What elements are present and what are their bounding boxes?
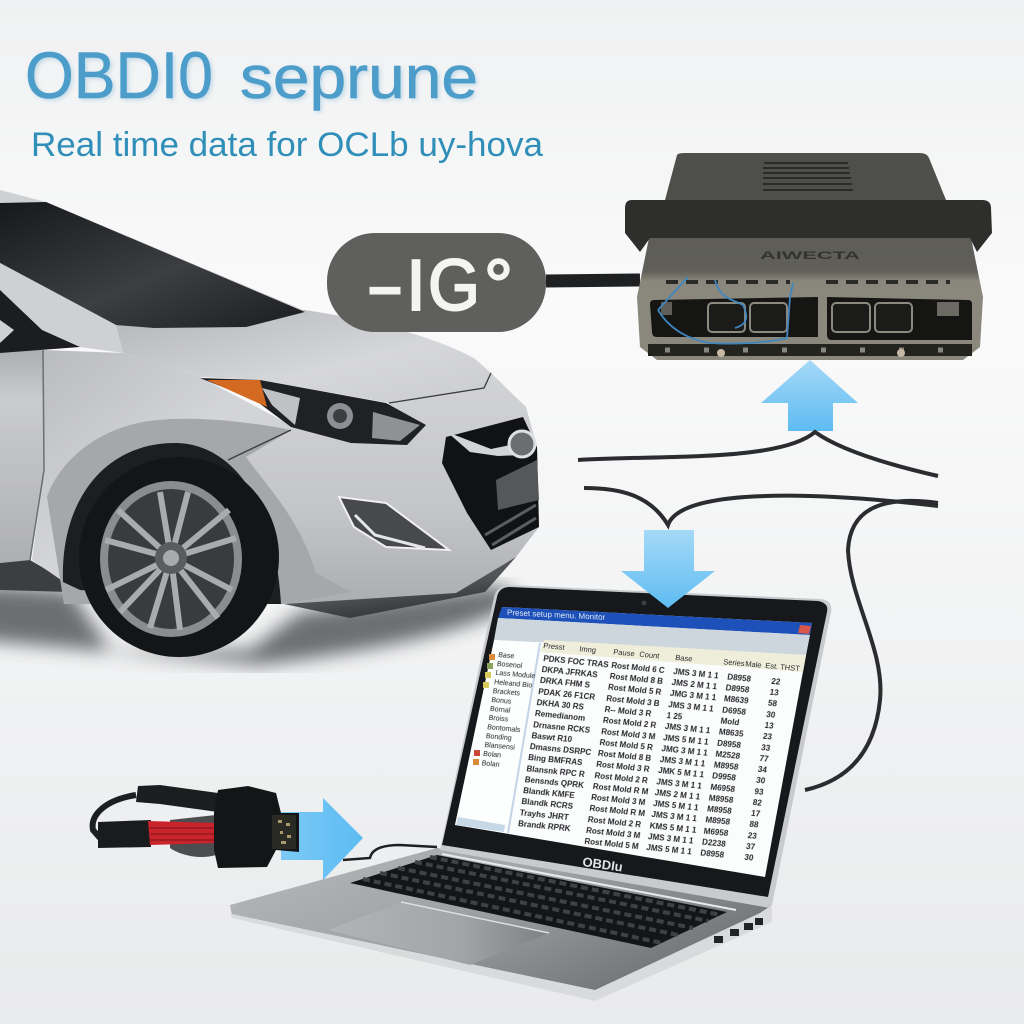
title: OBDI0: [27, 40, 215, 114]
data table: Rost Mold 3 M: [591, 793, 646, 807]
data table: DRKA FHM S: [539, 676, 591, 690]
temperature badge: G: [428, 246, 480, 326]
header labels: Est. THST: [765, 661, 801, 673]
arrow right: [281, 798, 363, 880]
lower body: [0, 560, 70, 592]
data table: Rost Mold 5 R: [607, 683, 662, 697]
side window: [0, 290, 80, 353]
screen: [455, 607, 812, 877]
data table: JMS 3 M 1 1: [668, 700, 715, 714]
data table: KMS 5 M 1 1: [649, 821, 698, 835]
data table: M6958: [710, 782, 736, 794]
keyboard: [350, 855, 727, 948]
data table: JMS 3 M 1 1: [664, 722, 711, 736]
data table: Blandk RCRS: [521, 797, 574, 811]
data table: 88: [749, 820, 760, 830]
data table: Rost Mold 2 R: [594, 771, 649, 785]
sidebar list: Bolan: [483, 751, 502, 760]
sidebar list: Bornal: [489, 706, 511, 715]
data table: D6958: [722, 705, 747, 717]
data table: JMS 5 M 1 1: [646, 843, 693, 857]
headlight: [200, 378, 426, 445]
data table: Rost Mold 8 B: [609, 672, 664, 686]
data table: M8639: [723, 694, 750, 706]
hood: [116, 310, 491, 403]
laptop: Preset setup menu. Monitor: [507, 608, 606, 622]
laptop lid: [440, 585, 831, 908]
sidebar list: Base: [498, 652, 515, 660]
wheel: [79, 457, 279, 657]
data table: Rost Mold 2 R: [602, 716, 657, 730]
data table: DKHA 30 RS: [536, 698, 585, 712]
title: seprune: [240, 44, 478, 111]
sidebar: [455, 640, 540, 833]
body seams: [228, 373, 491, 460]
data table: JMS 3 M 1 1: [651, 810, 698, 824]
data table: Bensnds QPRK: [524, 775, 585, 790]
laptop base: [230, 848, 772, 990]
temperature badge: [327, 233, 546, 332]
column header: [540, 640, 806, 672]
data table: M8958: [708, 793, 734, 805]
data table: M8958: [705, 815, 731, 827]
temperature badge: I: [406, 246, 426, 326]
badge cable: [546, 280, 640, 281]
title: [25, 38, 480, 114]
laptop cable: [343, 845, 437, 860]
car shadow: [0, 585, 520, 665]
sidebar list: Bonus: [491, 697, 512, 706]
data table: Rost Mold 3 M: [601, 727, 656, 741]
wheel arch band: [47, 419, 351, 604]
data table: 77: [759, 754, 770, 764]
data table: 17: [751, 809, 761, 819]
car: [0, 190, 539, 665]
data table: Rost Mold R M: [592, 782, 649, 796]
data table: Trayhs JHRT: [519, 808, 569, 822]
laptop logo: OBDIu: [582, 854, 624, 875]
grille chrome: [447, 432, 523, 456]
data table: 37: [745, 842, 756, 852]
roof strip: [0, 190, 308, 340]
touchpad: [328, 902, 549, 965]
data table: 34: [757, 765, 768, 775]
data table: D8958: [725, 683, 750, 695]
temperature badge: -: [366, 246, 404, 326]
data table: 30: [766, 710, 776, 720]
mirror: [0, 320, 14, 343]
data table: M8958: [707, 804, 733, 816]
data table: D8958: [727, 672, 752, 684]
data table: D8958: [717, 738, 742, 750]
data table: Rost Mold 3 M: [585, 826, 641, 840]
blue scribble: [658, 277, 793, 344]
data table: 30: [744, 853, 755, 863]
title bar: [498, 607, 812, 635]
data table: JMS 3 M 1 1: [659, 755, 706, 769]
data table: Rost Mold 5 R: [599, 738, 654, 752]
data table: JMS 5 M 1 1: [663, 733, 710, 747]
data table: Rost Mold 5 M: [584, 837, 640, 851]
data table: 1 25: [666, 711, 683, 722]
header labels: Count: [639, 650, 661, 661]
header labels: Pause: [613, 647, 635, 658]
arrow down: [621, 530, 715, 608]
title: OBDI0: [25, 38, 213, 112]
sidebar list: Broiss: [488, 715, 509, 724]
header labels: Male: [745, 659, 762, 670]
data table: 23: [747, 831, 758, 841]
sidebar list: [481, 652, 538, 771]
OBD connector: AIWECTA: [760, 250, 860, 262]
data table: Blansnk RPC R: [526, 764, 586, 779]
emblem: [509, 431, 535, 457]
data table: M8635: [718, 727, 745, 739]
data table: JMS 5 M 1 1: [653, 799, 700, 813]
data table: PDAK 26 F1CR: [538, 687, 596, 702]
laptop: [230, 585, 831, 1001]
data table: M8958: [713, 760, 740, 772]
data table: D9958: [712, 771, 737, 783]
header labels: Imng: [579, 644, 597, 655]
under-bumper shadow: [284, 557, 516, 618]
data table: Baswt R10: [531, 731, 573, 744]
header labels: Series: [723, 657, 746, 668]
data table: JMS 3 M 1 1: [647, 832, 695, 846]
data table: M2528: [715, 749, 741, 761]
header labels: Base: [675, 653, 693, 663]
data table: JMG 3 M 1 1: [661, 744, 709, 758]
ports: [714, 918, 763, 943]
subtitle: Real time data for OCLb uy-hova: [31, 126, 543, 164]
data table: JMS 2 M 1 1: [671, 678, 718, 692]
laptop edge: [230, 848, 772, 1001]
data table: Brandk RPRK: [517, 819, 571, 833]
sidebar list: Bosenol: [496, 661, 523, 670]
sidebar list: Brackets: [492, 688, 521, 697]
data table: Rost Mold 8 B: [597, 749, 652, 763]
data table: 82: [752, 798, 763, 808]
door: [0, 345, 44, 563]
data table: 58: [767, 699, 778, 709]
data table: Remedianom: [534, 709, 586, 723]
sidebar list: Bolan: [481, 760, 500, 769]
data table: 33: [761, 743, 771, 753]
grille: [442, 417, 539, 550]
data table: M6958: [703, 826, 729, 838]
data table: JMG 3 M 1 1: [669, 689, 717, 703]
sidebar list: Lass Module: [495, 670, 536, 681]
data table: [516, 654, 781, 863]
data table: JMS 3 M 1 1: [673, 667, 720, 681]
OBD connector: [625, 153, 992, 360]
title: seprune: [242, 46, 480, 113]
data table: JMK 5 M 1 1: [658, 766, 705, 780]
hinge strip: [442, 854, 736, 910]
wheel arch: [63, 443, 281, 604]
data table: Rost Mold R M: [589, 804, 646, 818]
cables: [578, 432, 938, 790]
A-pillar: [0, 263, 123, 353]
data table: Mold: [720, 716, 740, 727]
data table: JMS 2 M 1 1: [654, 788, 701, 802]
data table: Rost Mold 6 C: [611, 661, 665, 675]
header labels: Presst: [543, 641, 566, 652]
sidebar list: Blansensi: [484, 742, 516, 752]
header labels: [543, 641, 801, 673]
data table: Blandk KMFE: [523, 786, 576, 800]
fender: [32, 350, 300, 582]
data table: Rost Mold 2 R: [587, 815, 642, 829]
arrow up: [761, 360, 858, 431]
data table: JMS 3 M 1 1: [656, 777, 703, 791]
data table: D2238: [701, 837, 727, 849]
fog light: [339, 497, 449, 550]
data table: 30: [756, 776, 766, 786]
data table: D8958: [700, 848, 725, 860]
data table: DKPA JFRKAS: [541, 665, 599, 680]
data table: Drnasne RCKS: [533, 720, 591, 735]
data table: 13: [764, 721, 775, 731]
bumper: [246, 373, 539, 604]
data table: 23: [762, 732, 773, 742]
sidebar icons: [473, 654, 495, 765]
plate: [496, 460, 539, 510]
data table: 13: [769, 688, 780, 698]
sidebar list: Bonding: [485, 733, 512, 742]
window buttons: [798, 625, 811, 634]
data table: R-- Mold 3 R: [604, 705, 652, 718]
data table: Bing BMFRAS: [528, 753, 584, 767]
webcam: [642, 600, 646, 606]
data table: Dmasns DSRPC: [529, 742, 592, 757]
windshield: [0, 202, 305, 328]
sidebar list: Heleand Bio: [494, 679, 533, 689]
temperature badge: °: [484, 246, 513, 326]
data table: PDKS FOC TRAS: [543, 654, 610, 670]
data table: Rost Mold 3 R: [596, 760, 650, 774]
data table: 93: [754, 787, 765, 797]
data table: Rost Mold 3 B: [606, 694, 660, 708]
data table: 22: [771, 677, 781, 687]
toolbar: [494, 618, 810, 655]
sidebar list: Bontomals: [487, 724, 521, 734]
OBD plug: [93, 785, 299, 868]
